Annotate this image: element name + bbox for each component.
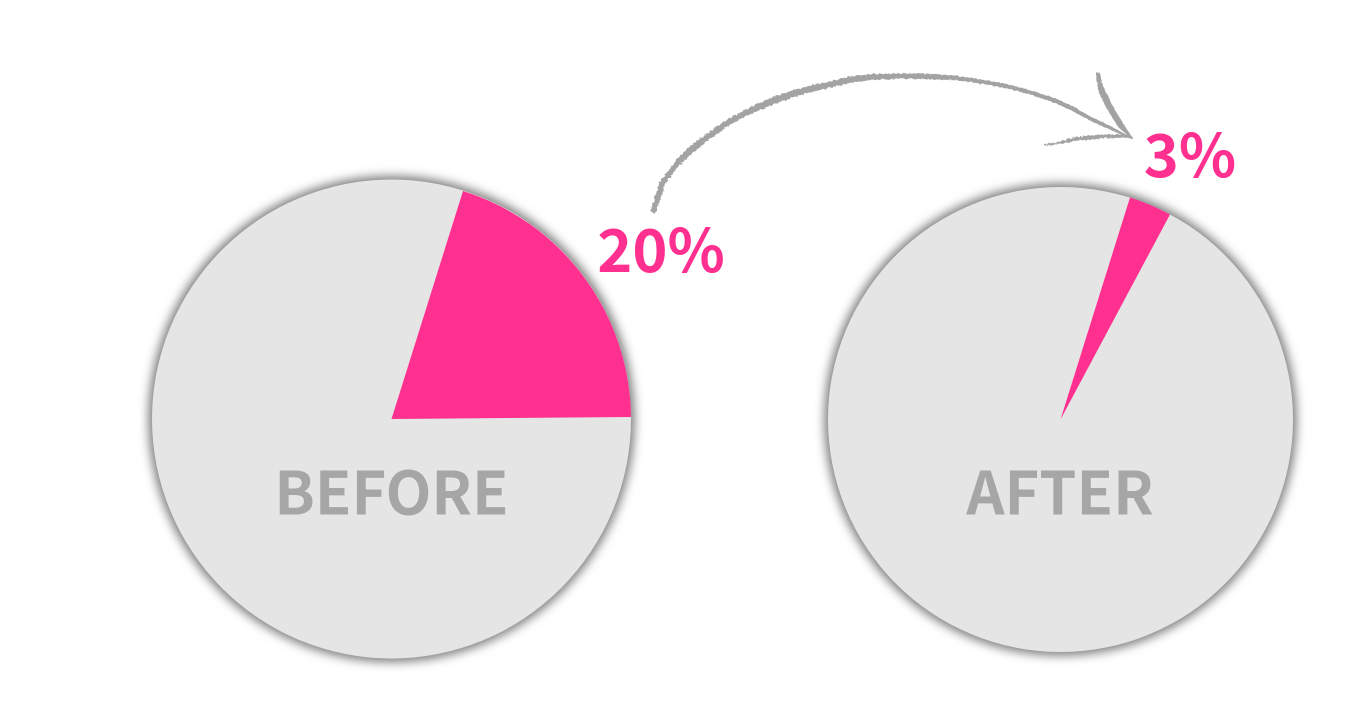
panel: after pie chart — [824, 184, 1296, 656]
after label: AFTER — [965, 446, 1154, 532]
after pie slice: 3% — [1060, 198, 1170, 420]
before label: BEFORE — [274, 446, 509, 532]
panel: before pie chart — [148, 176, 634, 662]
value: 20%: 20% — [597, 204, 725, 290]
arrow: sketched curve from 20% to 3% — [651, 73, 1132, 213]
value: 3%: 3% — [1144, 109, 1236, 195]
before pie slice: 20% — [392, 191, 631, 419]
